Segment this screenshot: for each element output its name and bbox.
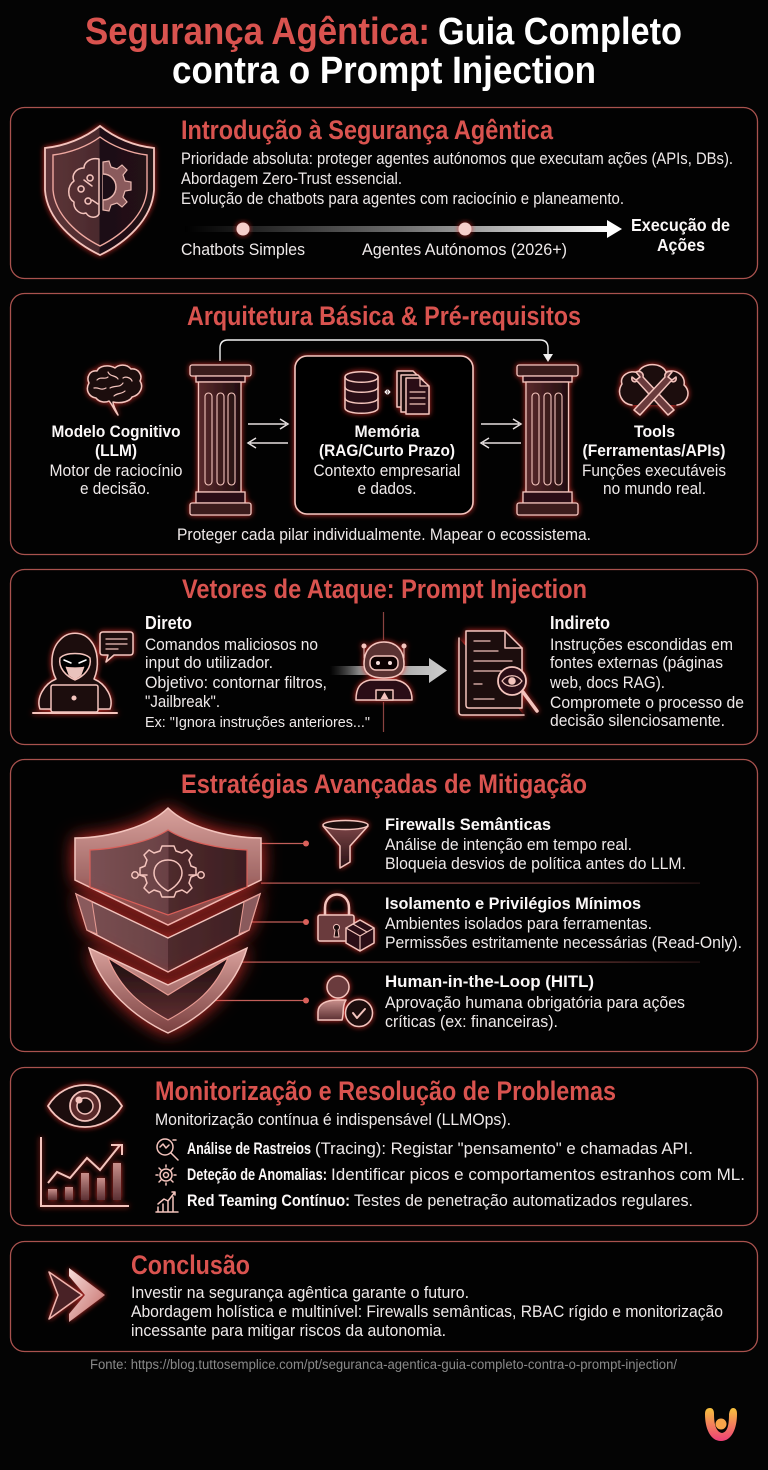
row: red teaming	[156, 1192, 693, 1212]
text: memória: (RAG/Curto Prazo)	[319, 442, 455, 460]
text: isolamento: Isolamento e Privilégios Mínimos	[385, 894, 641, 913]
panel: monitorização	[10, 1068, 758, 1226]
panel: mitigação	[10, 760, 758, 1052]
timeline arrow: Agentes Autónomos (2026+)	[362, 241, 567, 259]
icon: database and documents	[345, 371, 429, 414]
icon: lock and box	[318, 894, 374, 951]
text: hitl: críticas (ex: financeiras).	[385, 1013, 558, 1031]
title	[85, 11, 682, 92]
text: modelo cognitivo: e decisão.	[80, 480, 150, 498]
intro text: Evolução de chatbots para agentes com raciocínio e planeamento.	[181, 190, 624, 208]
text: indireto: Compromete o processo de	[550, 694, 744, 712]
panel: arquitetura	[10, 294, 758, 554]
text: conclusão: incessante para mitigar riscos da autonomia.	[131, 1322, 446, 1340]
title: Guia Completo	[438, 11, 682, 53]
text: direto: input do utilizador.	[145, 654, 273, 672]
text: direto: Comandos maliciosos no	[145, 636, 318, 654]
row: tracing: (Tracing): Registar "pensamento" e chamadas API.	[315, 1140, 693, 1158]
text: tools: Tools	[634, 423, 675, 441]
icon: robot	[356, 642, 412, 700]
arrows: right pair	[481, 419, 521, 448]
icon: document with magnifier	[459, 631, 537, 715]
timeline arrow: Ações	[657, 235, 705, 255]
text: modelo cognitivo: Motor de raciocínio	[50, 462, 182, 480]
heading: introdução: Introdução à Segurança Agêntica	[181, 115, 553, 145]
text: direto: "Jailbreak".	[145, 693, 220, 711]
icon: double chevron	[49, 1268, 105, 1322]
text: hitl: Aprovação humana obrigatória para ações	[385, 994, 685, 1012]
text: conclusão: Investir na segurança agêntica garante o futuro.	[131, 1284, 469, 1302]
text: tools: no mundo real.	[603, 480, 706, 498]
timeline arrow: Execução de	[631, 215, 730, 235]
text: tools	[582, 423, 726, 498]
title: contra o Prompt Injection	[172, 50, 596, 92]
text: direto: Objetivo: contornar filtros,	[145, 674, 327, 692]
text: pillar note: Proteger cada pilar individualmente. Mapear o ecossistema.	[177, 526, 591, 544]
panel: introdução	[10, 108, 758, 278]
icon: growth chart	[41, 1137, 129, 1206]
text: conclusão: Abordagem holística e multinível: Firewalls semânticas, RBAC rígido e monitorização	[131, 1303, 723, 1321]
gear emblem	[132, 846, 204, 897]
icon: person with check	[318, 976, 372, 1026]
box: memória	[295, 356, 473, 514]
timeline arrow: Chatbots Simples	[181, 241, 305, 259]
text: indireto: Instruções escondidas em	[550, 636, 733, 654]
timeline arrow	[181, 215, 730, 259]
text: indireto	[549, 612, 744, 730]
arrow: direct to indirect	[330, 658, 447, 683]
icon: brain	[87, 365, 142, 415]
row: anomalias: Deteção de Anomalias:	[187, 1166, 327, 1184]
pillar: right	[517, 365, 578, 515]
heading: monitorização: Monitorização e Resolução de Problemas	[155, 1076, 616, 1106]
text: indireto: Indireto	[550, 612, 610, 633]
text: hitl: Human-in-the-Loop (HITL)	[385, 972, 594, 991]
text: memória	[314, 423, 460, 498]
text: firewalls: Análise de intenção em tempo real.	[385, 836, 632, 854]
text: direto: Ex: "Ignora instruções anteriores..."	[145, 714, 370, 731]
heading: arquitetura: Arquitetura Básica & Pré-requisitos	[187, 301, 581, 331]
heading: conclusão: Conclusão	[131, 1250, 250, 1280]
text: firewalls: Firewalls Semânticas	[385, 815, 551, 834]
row: tracing: Análise de Rastreios	[187, 1140, 311, 1158]
icon: cloud with tools	[620, 365, 688, 415]
intro text: Abordagem Zero-Trust essencial.	[181, 170, 402, 188]
icon: layered shield	[75, 808, 261, 1033]
text: conclusão	[131, 1284, 723, 1340]
text: tools: Funções executáveis	[582, 462, 726, 480]
row: red teaming: Red Teaming Contínuo:	[187, 1192, 350, 1210]
text: modelo cognitivo	[50, 423, 182, 498]
heading: vetores: Vetores de Ataque: Prompt Injection	[182, 574, 587, 604]
icon: eye	[48, 1085, 122, 1127]
connector arrow over pillars	[220, 340, 553, 362]
intro text: monitorização: Monitorização contínua é indispensável (LLMOps).	[155, 1111, 511, 1129]
arrows: left pair	[248, 419, 288, 448]
panel: conclusão	[10, 1242, 758, 1352]
shield top layer	[75, 808, 261, 925]
row: tracing	[157, 1139, 693, 1160]
title: Segurança Agêntica:	[85, 11, 430, 53]
row: anomalias: Identificar picos e comportamentos estranhos com ML.	[331, 1166, 745, 1184]
connector lines	[200, 840, 700, 1004]
text: firewalls: Bloqueia desvios de política antes do LLM.	[385, 855, 686, 873]
text: firewalls	[385, 815, 686, 873]
icon: shield with brain and gear	[45, 126, 154, 255]
text: memória: Contexto empresarial	[314, 462, 460, 480]
text: hitl	[385, 972, 685, 1031]
text: isolamento	[385, 894, 742, 952]
text: indireto: web, docs RAG).	[549, 674, 665, 692]
text: modelo cognitivo: (LLM)	[95, 442, 137, 460]
text: isolamento: Permissões estritamente necessárias (Read-Only).	[385, 934, 742, 952]
pillar: left	[190, 365, 251, 515]
shield middle layer	[76, 894, 260, 972]
shield bottom layer	[89, 948, 247, 1033]
icon: hacker with speech bubble	[33, 632, 133, 713]
intro text	[181, 150, 733, 208]
row: anomalias	[156, 1165, 745, 1185]
heading: mitigação: Estratégias Avançadas de Mitigação	[181, 769, 587, 799]
row: red teaming: Testes de penetração automatizados regulares.	[354, 1192, 693, 1210]
text: direto: Direto	[145, 612, 192, 633]
text: isolamento: Ambientes isolados para ferramentas.	[385, 915, 652, 933]
panel: vetores de ataque	[10, 570, 758, 744]
text: memória: Memória	[354, 423, 420, 441]
icon: funnel	[323, 820, 368, 868]
icon: logo	[705, 1408, 737, 1441]
source line: Fonte: https://blog.tuttosemplice.com/pt/seguranca-agentica-guia-completo-contra-o-prompt-injection/	[90, 1357, 677, 1372]
divider with robot and arrow	[330, 612, 447, 732]
text: tools: (Ferramentas/APIs)	[582, 442, 726, 460]
text: indireto: fontes externas (páginas	[550, 654, 723, 672]
text: modelo cognitivo: Modelo Cognitivo	[52, 423, 180, 441]
text: memória: e dados.	[358, 480, 416, 498]
text: direto	[145, 612, 370, 731]
text: indireto: decisão silenciosamente.	[550, 712, 725, 730]
